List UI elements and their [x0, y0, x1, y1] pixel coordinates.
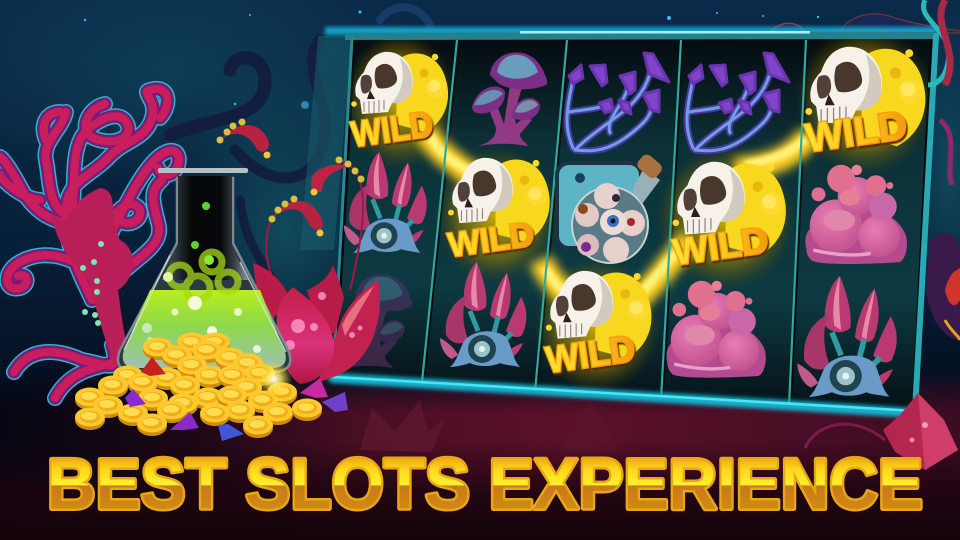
gems [125, 357, 348, 441]
icon: blue mushrooms [472, 52, 547, 146]
icon: large claw [797, 276, 897, 397]
reel column 5 [792, 40, 930, 406]
wild skull 2: WILD [446, 215, 536, 265]
icon: purple mushrooms right [687, 53, 789, 151]
lotus flower [253, 263, 380, 384]
icon: faded mushroom [337, 274, 412, 368]
wild skull 4 [670, 162, 786, 273]
background stars [84, 10, 819, 109]
icon: claw row 3 [440, 262, 526, 367]
icon: eye bottle [557, 152, 664, 263]
icon: purple mushrooms left [567, 53, 669, 151]
reel column 4 [664, 40, 805, 406]
flask liquid [123, 290, 286, 368]
right side tentacles and crystal [883, 0, 960, 470]
wild skull 4: WILD [670, 218, 771, 273]
flask foam [169, 252, 238, 300]
background: floor crystals [360, 400, 620, 452]
column dividers [422, 40, 806, 406]
gold coin pile [75, 332, 322, 438]
wild skull 5 [803, 47, 925, 161]
title: BEST SLOTS EXPERIENCE [47, 446, 923, 524]
floor tentacle [805, 424, 885, 448]
icon: pink blob upper [805, 165, 907, 264]
icon: claw row 2 [344, 152, 427, 253]
flask [118, 168, 290, 372]
icon: pink blob lower [667, 281, 766, 378]
tree: coral [0, 89, 179, 398]
reel column 1 [337, 40, 456, 382]
wild skull 2 [446, 158, 550, 265]
slot machine panel [325, 24, 938, 413]
flask neck [162, 176, 248, 280]
wild skull 5: WILD [803, 103, 909, 161]
wild skull 1: WILD [348, 103, 435, 155]
reel column 3 [538, 40, 680, 399]
reel column 2 [425, 40, 566, 392]
panel: reel board [333, 36, 937, 410]
wild skull 1 [348, 52, 448, 155]
wild skull 3 [543, 271, 651, 381]
background silhouette: dark tentacles [170, 7, 430, 330]
winning line glow [344, 24, 935, 393]
flask rim [158, 168, 248, 173]
flask glass body [118, 178, 290, 372]
tentacle antennas with glowing dots [216, 118, 364, 290]
top right background bubbles [770, 14, 960, 33]
panel frame: neon edges [325, 27, 938, 413]
wild skull 3: WILD [543, 327, 637, 381]
background: teal strip beside reels [300, 36, 352, 250]
tree trunk [52, 188, 135, 375]
flask bubbles [142, 202, 261, 353]
